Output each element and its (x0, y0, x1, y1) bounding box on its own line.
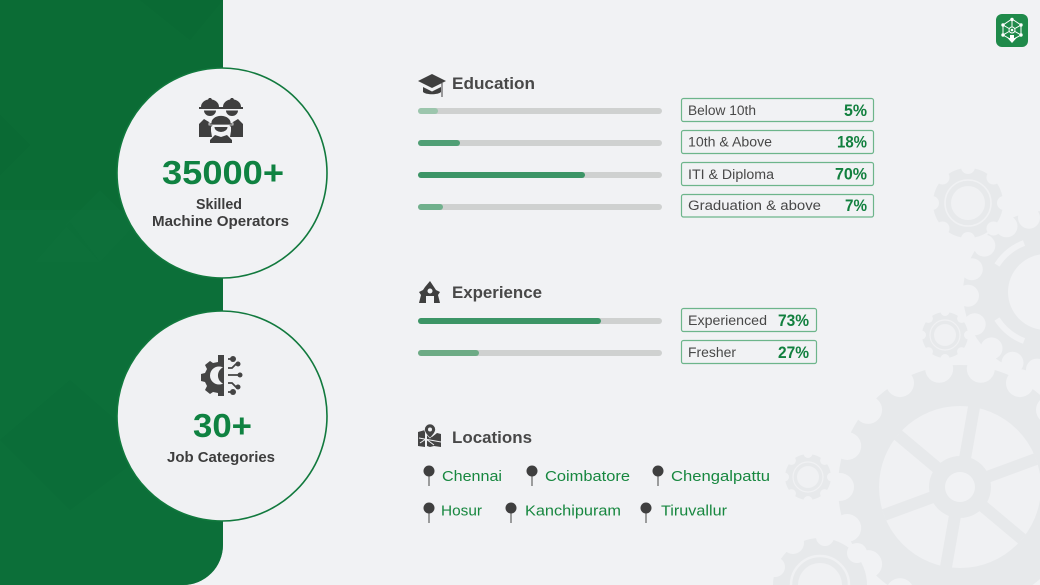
bar: graduation and above (418, 204, 662, 210)
number: 30+ (193, 407, 252, 444)
location: Chennai (424, 466, 502, 486)
location: Hosur: Hosur (441, 504, 482, 520)
label: experienced: 73% (778, 311, 809, 330)
small gear top (925, 160, 1011, 246)
location: Chengalpattu: Chengalpattu (671, 469, 770, 485)
background gears (765, 160, 1040, 585)
bar: ITI and diploma (418, 172, 662, 178)
logo (996, 14, 1028, 47)
label: fresher: 27% (778, 343, 809, 362)
location: Coimbatore (526, 466, 630, 486)
icon: workers (199, 98, 243, 143)
icon: gear with circuit (201, 355, 242, 396)
location: Chennai: Chennai (442, 469, 502, 485)
label: experienced: Experienced (688, 313, 767, 328)
icon: experience (419, 281, 440, 303)
location: Kanchipuram: Kanchipuram (525, 504, 621, 520)
section: education (418, 74, 874, 217)
label: below 10th: 5% (844, 101, 867, 120)
label: fresher (682, 340, 816, 364)
label: graduation and above (682, 194, 874, 217)
label: ITI and diploma (682, 162, 874, 186)
stat circle: job categories (117, 311, 327, 521)
section: locations (418, 424, 770, 523)
large gear (826, 355, 1040, 585)
label: ITI and diploma: 70% (835, 164, 867, 184)
location: Hosur (424, 502, 482, 523)
bar: fresher (418, 350, 662, 356)
small gear middle (917, 307, 973, 363)
heading: Education (452, 74, 535, 93)
number: 35000+ (162, 154, 284, 191)
caption: Skilled (196, 197, 242, 213)
caption: Machine Operators (152, 214, 289, 230)
bottom gear (765, 528, 867, 585)
bar: experienced (418, 318, 662, 324)
heading: Locations (452, 428, 532, 447)
location: Kanchipuram (506, 502, 621, 523)
label: 10th and above: 10th & Above (688, 134, 772, 150)
label: fresher: Fresher (688, 345, 737, 360)
label: below 10th: Below 10th (688, 103, 756, 118)
label: graduation and above: Graduation & above (688, 198, 821, 213)
label: below 10th (682, 98, 874, 122)
bar: 10th and above (418, 140, 662, 146)
stat circle: skilled machine operators (117, 68, 327, 278)
label: 10th and above: 18% (837, 132, 867, 152)
label: graduation and above: 7% (845, 196, 867, 215)
icon: graduation cap (418, 74, 446, 97)
caption (152, 197, 289, 230)
icon: map with pin (418, 424, 441, 447)
green side panel (0, 0, 223, 585)
bar: below 10th (418, 108, 662, 114)
right gear (957, 207, 1040, 381)
caption: Job Categories (167, 450, 275, 466)
label: experienced (682, 308, 816, 332)
label: 10th and above (682, 130, 874, 154)
location: Chengalpattu (652, 466, 770, 486)
location: Tiruvallur: Tiruvallur (661, 504, 727, 520)
location: Coimbatore: Coimbatore (545, 469, 630, 485)
section: experience (418, 281, 816, 364)
heading: Experience (452, 283, 542, 302)
label: ITI and diploma: ITI & Diploma (688, 167, 775, 182)
small gear lower (780, 449, 836, 505)
location: Tiruvallur (640, 502, 727, 523)
